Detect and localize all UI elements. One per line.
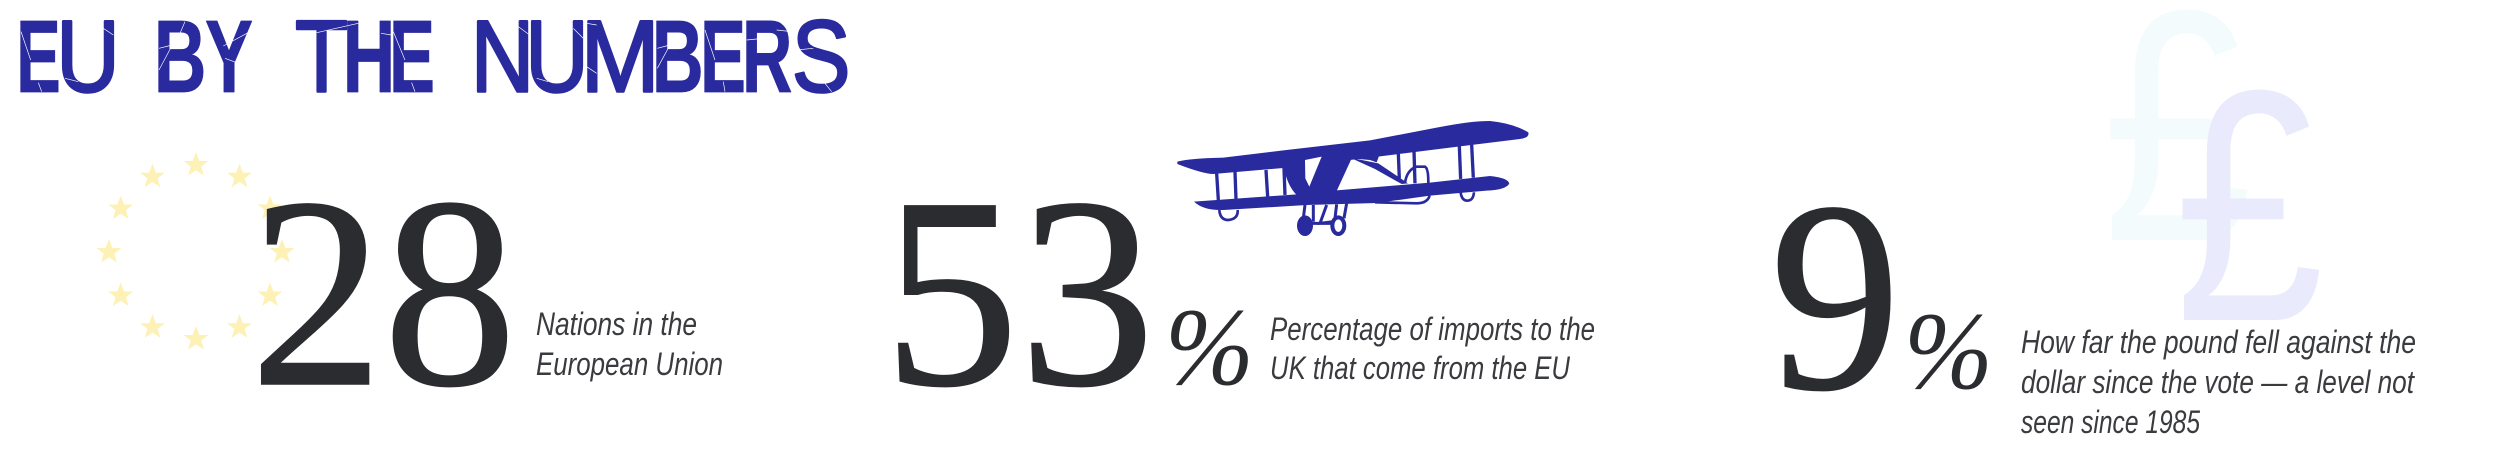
text: pound fall (2021, 324, 2416, 440)
number: 28: 28 (250, 143, 517, 444)
percent sign: 9: % (1904, 291, 1993, 412)
text: pound fall: dollar since the vote — a level not (2021, 364, 2415, 400)
title: R (742, 0, 792, 114)
title: E (389, 0, 435, 114)
number: 53: 53 (883, 142, 1155, 443)
title: M (581, 0, 660, 113)
icon: biplane (1177, 121, 1529, 236)
title: Y (205, 0, 253, 114)
title: N (471, 0, 534, 114)
number: 9: 9 (1770, 145, 1901, 447)
title: E (700, 0, 746, 114)
text: pound fall: seen since 1985 (2021, 404, 2200, 440)
text: nations: European Union (536, 346, 723, 382)
text: imports: Percentage of imports to the (1270, 311, 1595, 347)
title: T (295, 0, 348, 114)
icon: lavender pound sign: £ (2175, 21, 2324, 390)
text: pound fall: How far the pound fell against the (2021, 324, 2416, 360)
title: H (343, 0, 395, 114)
text: nations (536, 306, 723, 382)
percent sign: 53: % (1165, 287, 1254, 408)
title: B (652, 0, 704, 114)
title: B (154, 0, 206, 114)
title: E (16, 0, 61, 115)
title: U (525, 0, 589, 114)
title: S (792, 0, 850, 114)
text: nations: Nations in the (536, 306, 697, 342)
title (16, 0, 850, 115)
text: imports (1270, 311, 1595, 386)
title: U (56, 0, 120, 114)
text: imports: UK that come from the EU (1270, 350, 1571, 386)
icon: EU star circle (97, 152, 294, 350)
